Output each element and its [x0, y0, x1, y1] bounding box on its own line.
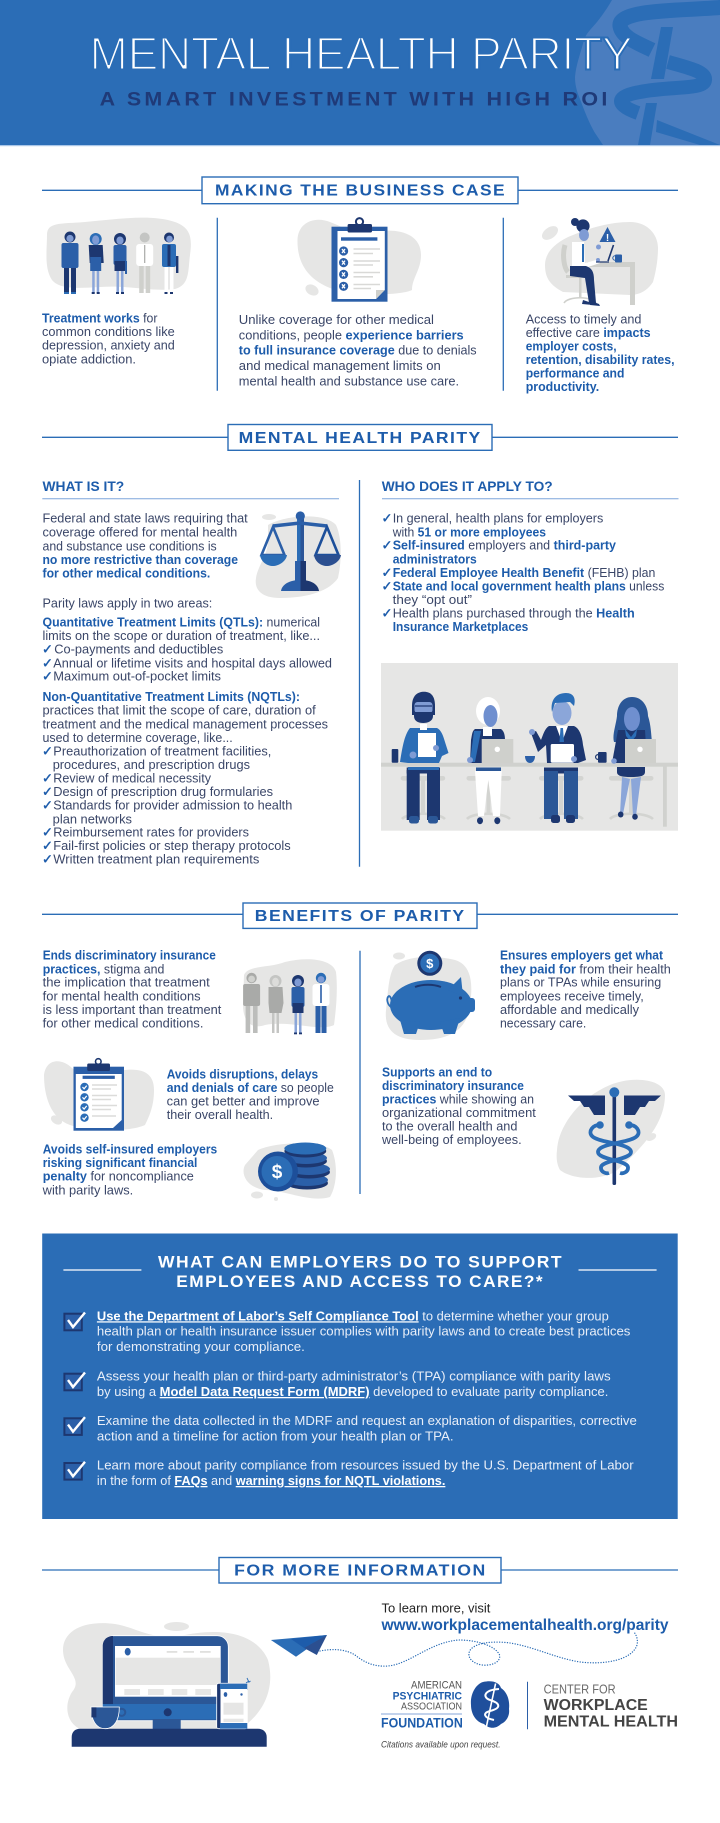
- text: definition: Parity laws apply in two areas:: [42, 596, 212, 611]
- text: definition: coverage offered for mental health: [42, 524, 237, 539]
- section heading: benefits of parity: BENEFITS OF PARITY: [255, 908, 466, 925]
- benefit: employers get what they paid for: [386, 948, 671, 1040]
- text: non-quantitative limits: ✓: [42, 799, 53, 814]
- text: non-quantitative limits: ✓: [42, 839, 53, 854]
- text: barriers: to full insurance coverage due to denials: [239, 343, 477, 358]
- text: barriers: conditions, people experience barriers: [239, 327, 464, 342]
- text: treatment works: common conditions like: [42, 324, 175, 339]
- text: impact: retention, disability rates,: [526, 352, 674, 367]
- text: non-quantitative limits: treatment and the medical management processes: [42, 716, 328, 731]
- text: non-quantitative limits: [42, 689, 328, 868]
- text: non-quantitative limits: ✓: [42, 744, 53, 759]
- text: quantitative limits: limits on the scope or duration of treatment, like...: [42, 628, 320, 643]
- text: ends discrimination: is less important than treatment: [43, 1002, 222, 1017]
- text: get what they paid for: necessary care.: [500, 1015, 586, 1030]
- section heading: making the business case: [42, 177, 678, 204]
- text: ends discrimination: Ends discriminatory insurance: [43, 948, 216, 963]
- icon: checkbox: [64, 1417, 85, 1435]
- panel: what is it: [42, 479, 341, 868]
- checklist: who it applies to: ✓: [382, 539, 392, 554]
- text: organizational commitment: Supports an end to: [382, 1064, 492, 1079]
- action 3: action and a timeline for action from your health plan or TPA.: [97, 1429, 454, 1443]
- text: impact: performance and: [526, 366, 624, 381]
- icon: five standing people: [46, 218, 191, 294]
- text: non-quantitative limits: Non-Quantitative Treatment Limits (NQTLs):: [42, 689, 300, 704]
- text: financial penalty: Avoids self-insured employers: [43, 1142, 217, 1157]
- header watermark: serpent and staff: [575, 0, 720, 145]
- checklist: who it applies to: with 51 or more employees: [392, 524, 546, 539]
- panel: who does it apply to: [381, 479, 678, 831]
- panel: treatment works: [42, 218, 191, 366]
- text: definition: Federal and state laws requiring that: [42, 511, 248, 526]
- text: financial penalty: risking significant financial: [43, 1155, 197, 1170]
- icon: caduceus: [557, 1080, 665, 1185]
- text: quantitative limits: Maximum out-of-pocket limits: [53, 669, 221, 684]
- text: avoids disruptions: and denials of care so people: [167, 1080, 334, 1095]
- text: financial penalty: with parity laws.: [42, 1182, 133, 1197]
- text: barriers: Unlike coverage for other medical: [239, 312, 434, 327]
- text: ends discrimination: the implication that treatment: [43, 975, 210, 990]
- action 4: in the form of FAQs and warning signs for NQTL violations.: [97, 1474, 445, 1488]
- text: financial penalty: [42, 1142, 217, 1197]
- checklist: who it applies to: [382, 511, 664, 634]
- panel: what can employers do: [42, 1234, 678, 1519]
- benefit: avoids disruptions: [44, 1059, 334, 1131]
- checklist: who it applies to: Insurance Marketplaces: [393, 619, 528, 634]
- checklist: who it applies to: Health plans purchased through the Health: [393, 606, 635, 621]
- checklist: who it applies to: In general, health plans for employers: [393, 511, 603, 526]
- text: non-quantitative limits: Standards for provider admission to health: [53, 798, 292, 813]
- benefit: ends discrimination: [43, 948, 337, 1034]
- icon: piggy bank and coin: [386, 951, 475, 1040]
- action 3: [64, 1414, 637, 1443]
- text: get what they paid for: [500, 948, 671, 1030]
- text: non-quantitative limits: Written treatment plan requirements: [53, 852, 259, 867]
- text: avoids disruptions: their overall health.: [167, 1107, 273, 1122]
- text: ends discrimination: for other medical conditions.: [43, 1015, 203, 1030]
- icon: checkbox: [64, 1462, 85, 1480]
- text: get what they paid for: affordable and medically: [500, 1002, 640, 1017]
- subheading: who does it apply to: WHO DOES IT APPLY TO?: [382, 479, 553, 494]
- text: definition: no more restrictive than coverage: [42, 552, 238, 567]
- subtitle: A SMART INVESTMENT WITH HIGH ROI: [100, 89, 611, 111]
- icon: employee at desk with warning: [539, 218, 658, 306]
- text: barriers: mental health and substance use care.: [239, 373, 459, 388]
- action 2: Assess your health plan or third-party administrator’s (TPA) compliance with parity laws: [97, 1370, 611, 1384]
- person: man with tablet and coffee: [525, 693, 586, 823]
- action 1: [64, 1309, 630, 1354]
- text: non-quantitative limits: practices that limit the scope of care, duration of: [42, 703, 316, 718]
- logo: American Psychiatric Association Foundation: ASSOCIATION: [401, 1701, 462, 1712]
- text: ends discrimination: practices, stigma and: [43, 961, 164, 976]
- footnote: citations: Citations available upon request.: [381, 1739, 500, 1749]
- section heading: for more information: FOR MORE INFORMATION: [234, 1562, 487, 1579]
- panel heading: [63, 1252, 657, 1291]
- text: impact: effective care impacts: [526, 325, 651, 340]
- text: barriers: and medical management limits on: [239, 358, 441, 373]
- icon: stack of coins: $: [272, 1162, 283, 1183]
- text: quantitative limits: ✓: [42, 670, 53, 685]
- checklist: who it applies to: ✓: [382, 566, 392, 581]
- checklist: who it applies to: Federal Employee Health Benefit (FEHB) plan: [393, 565, 655, 580]
- text: avoids disruptions: can get better and improve: [167, 1094, 320, 1109]
- text: non-quantitative limits: Reimbursement rates for providers: [53, 825, 249, 840]
- text: definition: [42, 511, 248, 611]
- text: financial penalty: penalty for noncompliance: [43, 1169, 194, 1184]
- icon: employee at desk with warning: !: [606, 233, 609, 244]
- text: non-quantitative limits: ✓: [42, 785, 53, 800]
- text: treatment works: opiate addiction.: [42, 351, 136, 366]
- text: definition: and substance use conditions is: [42, 538, 217, 553]
- text: quantitative limits: Quantitative Treatment Limits (QTLs): numerical: [42, 615, 320, 630]
- checklist: who it applies to: Self-insured employers and third-party: [393, 538, 617, 553]
- checklist: who it applies to: State and local government health plans unless: [393, 579, 664, 594]
- text: treatment works: [42, 311, 175, 366]
- text: non-quantitative limits: Review of medical necessity: [53, 770, 212, 785]
- text: non-quantitative limits: ✓: [42, 826, 53, 841]
- text: get what they paid for: they paid for from their health: [500, 961, 671, 976]
- text: treatment works: depression, anxiety and: [42, 338, 175, 353]
- text: ends discrimination: for mental health conditions: [43, 988, 201, 1003]
- icon: checkbox: [64, 1312, 85, 1330]
- text: barriers: [239, 312, 477, 388]
- panel: barriers to coverage: [239, 218, 477, 388]
- text: non-quantitative limits: procedures, and prescription drugs: [53, 757, 250, 772]
- checklist: who it applies to: ✓: [382, 512, 392, 527]
- action 4: Learn more about parity compliance from resources issued by the U.S. Department of Labor: [97, 1459, 634, 1473]
- text: non-quantitative limits: used to determine coverage, like...: [42, 730, 233, 745]
- section heading: mental health parity: MENTAL HEALTH PARITY: [239, 430, 482, 447]
- section heading: benefits of parity: [42, 903, 678, 928]
- action 2: by using a Model Data Request Form (MDRF) developed to evaluate parity compliance.: [97, 1385, 608, 1399]
- text: impact: productivity.: [526, 379, 599, 394]
- text: non-quantitative limits: ✓: [42, 853, 53, 868]
- logo: American Psychiatric Association Foundation: AMERICAN: [411, 1680, 462, 1692]
- person: woman with long hair and laptop: [596, 697, 656, 820]
- section heading: for more information: [42, 1558, 678, 1583]
- logo: American Psychiatric Association Foundation: [381, 1680, 509, 1731]
- text: non-quantitative limits: plan networks: [53, 811, 132, 826]
- icon: clipboard with checks: [44, 1059, 154, 1131]
- contact link: [380, 1601, 669, 1634]
- action 1: health plan or health insurance issuer complies with parity laws and to create best practices: [97, 1325, 630, 1339]
- person: bearded man with document: [392, 692, 448, 824]
- icon: four people: [243, 959, 337, 1034]
- subheading: what is it: WHAT IS IT?: [42, 479, 124, 494]
- text: treatment works: Treatment works for: [42, 311, 158, 326]
- text: quantitative limits: [42, 615, 332, 685]
- text: impact: Access to timely and: [526, 312, 641, 327]
- text: avoids disruptions: [167, 1066, 334, 1122]
- text: quantitative limits: ✓: [42, 656, 53, 671]
- illustration: computer, phone and coffee cup: [63, 1622, 270, 1747]
- text: impact: [526, 312, 674, 394]
- text: avoids disruptions: Avoids disruptions, delays: [167, 1066, 318, 1081]
- text: quantitative limits: Co-payments and deductibles: [54, 642, 223, 657]
- text: quantitative limits: Annual or lifetime visits and hospital days allowed: [53, 655, 332, 670]
- person: woman with laptop: [467, 697, 513, 824]
- action 4: [64, 1459, 634, 1488]
- text: non-quantitative limits: Preauthorization of treatment facilities,: [53, 743, 271, 758]
- text: ends discrimination: [43, 948, 222, 1030]
- text: organizational commitment: organizational commitment: [382, 1105, 536, 1120]
- text: organizational commitment: discriminatory insurance: [382, 1078, 524, 1093]
- contact link: www.workplacementalhealth.org/parity: [380, 1617, 669, 1634]
- logo: American Psychiatric Association Foundation: PSYCHIATRIC: [393, 1690, 462, 1702]
- icon: stack of coins: [244, 1142, 336, 1201]
- logo: Center for Workplace Mental Health: [544, 1682, 678, 1731]
- action 1: for demonstrating your compliance.: [97, 1340, 305, 1354]
- logo: American Psychiatric Association Foundation: FOUNDATION: [381, 1716, 463, 1731]
- icon: piggy bank and coin: $: [426, 956, 434, 971]
- section heading: mental health parity: [42, 424, 678, 450]
- panel heading: EMPLOYEES AND ACCESS TO CARE?*: [176, 1272, 544, 1291]
- logo: Center for Workplace Mental Health: WORKPLACE: [544, 1697, 648, 1714]
- action 1: Use the Department of Labor’s Self Compliance Tool to determine whether your group: [97, 1309, 609, 1323]
- text: organizational commitment: well-being of employees.: [381, 1132, 522, 1147]
- checklist: who it applies to: ✓: [382, 580, 392, 595]
- arrow: dotted flight path: [320, 1632, 637, 1666]
- benefit: avoids financial penalty: [42, 1142, 336, 1201]
- panel: timely care impact: [526, 218, 674, 394]
- logo: Center for Workplace Mental Health: CENTER FOR: [544, 1682, 616, 1697]
- text: impact: employer costs,: [526, 339, 617, 354]
- action 3: Examine the data collected in the MDRF and request an explanation of disparities, corrective: [97, 1414, 637, 1428]
- checklist: who it applies to: they “opt out”: [393, 592, 472, 607]
- text: organizational commitment: to the overall health and: [382, 1118, 517, 1133]
- text: get what they paid for: Ensures employers get what: [500, 948, 664, 963]
- header banner: [0, 0, 720, 146]
- text: quantitative limits: ✓: [42, 643, 53, 658]
- icon: clipboard with crosses: [297, 218, 421, 302]
- text: get what they paid for: plans or TPAs while ensuring: [500, 975, 661, 990]
- illustration: four people at a table: [381, 663, 678, 831]
- checklist: who it applies to: administrators: [393, 551, 477, 566]
- checklist: who it applies to: ✓: [382, 607, 392, 622]
- text: organizational commitment: practices while showing an: [382, 1091, 534, 1106]
- panel heading: WHAT CAN EMPLOYERS DO TO SUPPORT: [158, 1252, 563, 1271]
- section heading: making the business case: MAKING THE BUSINESS CASE: [215, 182, 506, 200]
- logo: Center for Workplace Mental Health: MENTAL HEALTH: [544, 1714, 678, 1731]
- text: organizational commitment: [381, 1064, 536, 1147]
- text: non-quantitative limits: ✓: [42, 771, 53, 786]
- text: definition: for other medical conditions.: [42, 565, 210, 580]
- benefit: organizational commitment: [381, 1064, 665, 1185]
- text: non-quantitative limits: Fail-first policies or step therapy protocols: [53, 838, 291, 853]
- action 2: [64, 1370, 611, 1399]
- text: get what they paid for: employees receive timely,: [500, 988, 644, 1003]
- contact link: To learn more, visit: [382, 1601, 491, 1616]
- icon: checkbox: [64, 1372, 85, 1390]
- icon: scales of justice: [256, 511, 341, 598]
- text: non-quantitative limits: Design of prescription drug formularies: [53, 784, 273, 799]
- icon: paper airplane: [271, 1635, 327, 1657]
- title: MENTAL HEALTH PARITY: [90, 28, 632, 80]
